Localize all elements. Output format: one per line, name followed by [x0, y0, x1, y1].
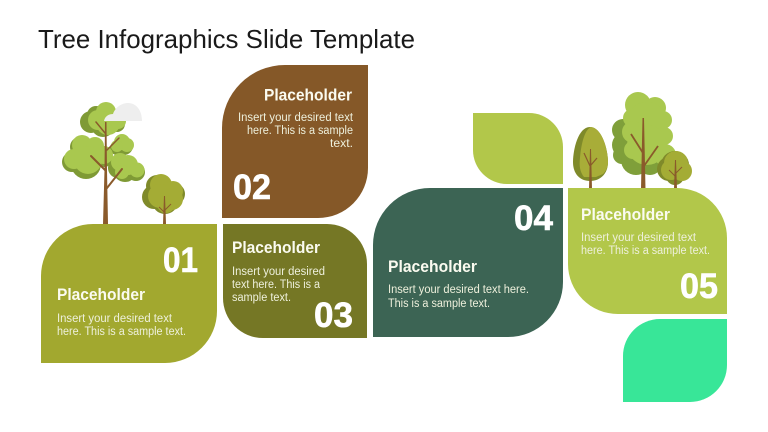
title: Tree Infographics Slide Template [38, 24, 415, 54]
text 02: Insert your desired text [238, 112, 354, 124]
panel: 03 [223, 224, 367, 338]
heading 04: Placeholder [388, 258, 478, 276]
text 03: sample text. [232, 292, 291, 304]
panel: 04 [373, 188, 563, 337]
panel: 01 [41, 224, 217, 363]
text 02: here. This is a sample [247, 125, 353, 137]
text 03: text here. This is a [232, 279, 321, 291]
panel: 05 [568, 188, 727, 314]
text 02: text. [330, 138, 353, 150]
icon: right trees [573, 92, 692, 189]
icon: cloud [104, 103, 142, 121]
text 03: Insert your desired [232, 266, 325, 278]
number 01: 01 [163, 241, 198, 280]
leaf: light green top [473, 113, 563, 184]
text 05: Insert your desired text [581, 232, 697, 244]
heading 01: Placeholder [57, 286, 146, 304]
text 04: Insert your desired text here. [388, 284, 529, 296]
number 05: 05 [680, 267, 718, 306]
leaf: mint bottom [623, 319, 727, 402]
text 05: here. This is a sample text. [581, 245, 710, 257]
number 02: 02 [233, 168, 271, 207]
text 01: Insert your desired text [57, 313, 173, 325]
text 01: here. This is a sample text. [57, 326, 186, 338]
heading 05: Placeholder [581, 206, 671, 224]
text 04: This is a sample text. [388, 298, 490, 310]
heading 03: Placeholder [232, 239, 321, 257]
icon: left tree with cloud [62, 102, 185, 224]
number 03: 03 [314, 296, 353, 335]
number 04: 04 [514, 199, 554, 238]
panel: 02 [222, 65, 368, 218]
heading 02: Placeholder [264, 86, 353, 104]
